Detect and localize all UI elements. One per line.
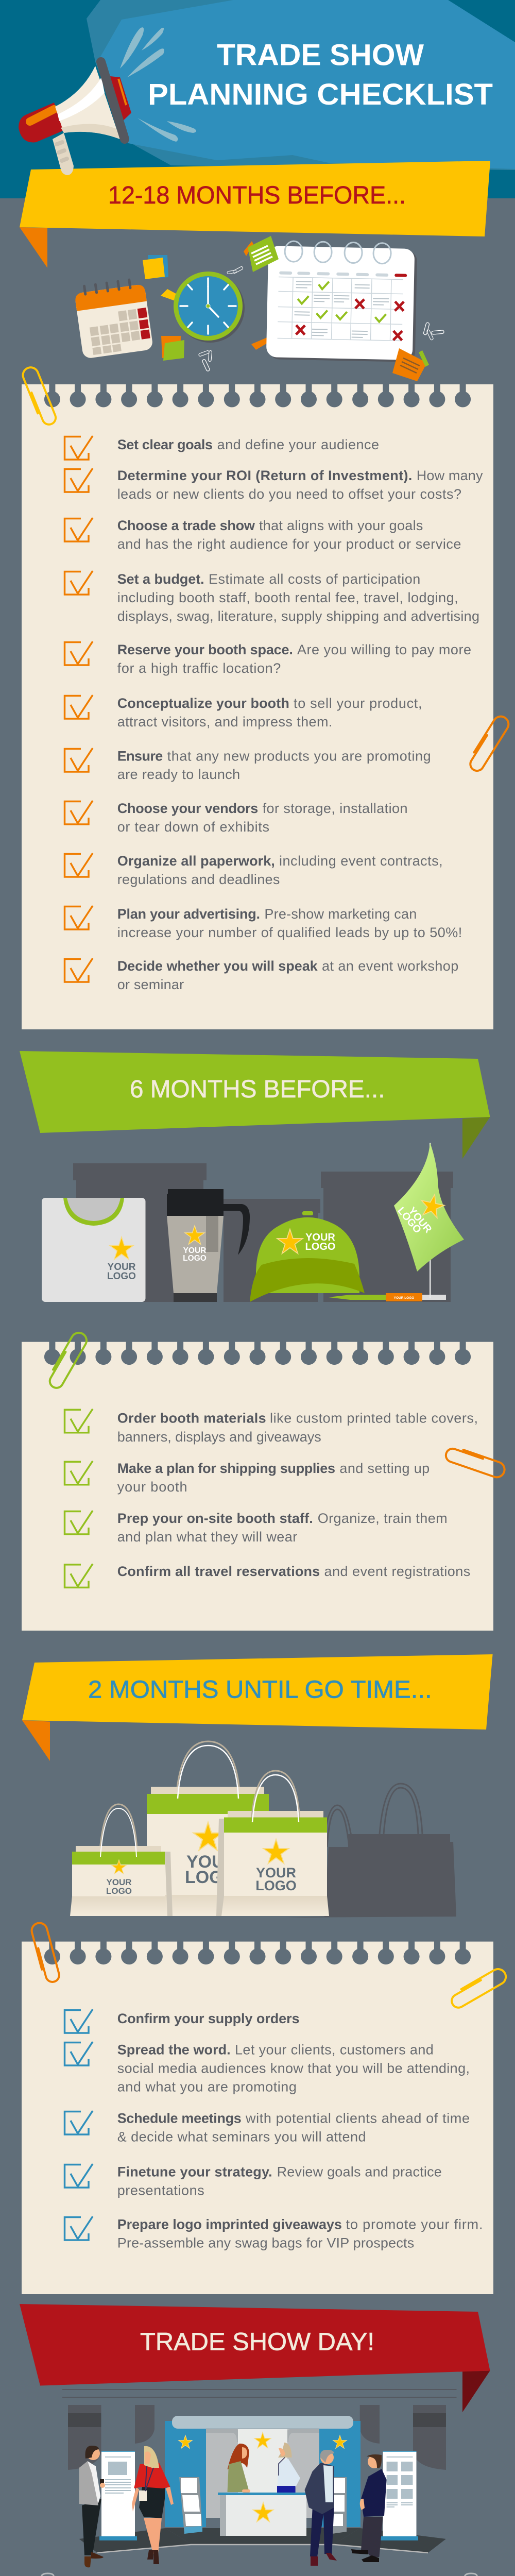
checklist item: prepare giveaways: Prepare logo imprinted giveaways: [117, 2216, 342, 2232]
icon: clock: [174, 272, 245, 343]
checklist item: order booth materials: [65, 1409, 478, 1445]
checklist item: organize paperwork: Organize all paperwork,: [117, 853, 275, 869]
paperclip orange: [30, 1921, 61, 1984]
person: man in dark jacket: [351, 2454, 387, 2562]
checklist item: reserve booth space: Are you willing to pay more: [297, 642, 471, 657]
paperclip green: [46, 1330, 89, 1391]
icon: wall calendar: [266, 241, 417, 362]
banner: 6 months before: [20, 1051, 490, 1159]
checklist item: finetune strategy: presentations: [117, 2183, 204, 2198]
checklist item: determine ROI: Determine your ROI (Return of Investment).: [117, 468, 412, 483]
checklist item: set a budget: Estimate all costs of participation: [209, 571, 420, 587]
checklist item: determine ROI: How many: [417, 468, 483, 483]
checklist item: set clear goals: [65, 436, 379, 460]
checklist item: finetune strategy: Finetune your strategy.: [117, 2164, 272, 2180]
checklist item: prepare giveaways: [65, 2216, 483, 2250]
title: [148, 38, 493, 111]
icon: megaphone: [19, 27, 196, 175]
checklist item: finetune strategy: Review goals and practice: [277, 2164, 442, 2180]
checklist item: ensure products: are ready to launch: [117, 767, 240, 782]
icon: small shopping bag: LOGO: [106, 1886, 132, 1896]
paper tear holes: [44, 1941, 471, 1964]
checklist item: organize paperwork: [65, 853, 443, 887]
banner: 2 months until go time: [22, 1654, 493, 1761]
checklist item: finetune strategy: [65, 2164, 442, 2198]
checklist item: set clear goals: Set clear goals: [117, 437, 213, 452]
icon: green cap: [250, 1211, 365, 1302]
checklist item: prep booth staff: Prep your on-site booth staff.: [117, 1511, 313, 1526]
brochure stands: [179, 2477, 347, 2534]
banner: trade show day: TRADE SHOW DAY!: [140, 2329, 374, 2356]
checklist item: schedule meetings: Schedule meetings: [117, 2111, 242, 2126]
checklist item: conceptualize booth: to sell your product,: [294, 696, 422, 711]
person: woman in light blue shirt: [277, 2443, 300, 2493]
checklist item: ensure products: Ensure: [117, 748, 163, 764]
banner: 12-18 months before: [20, 161, 490, 268]
floor: [79, 2528, 446, 2553]
icon: t-shirt with logo: [42, 1198, 145, 1302]
banner: 6 months before: 6 MONTHS BEFORE...: [130, 1076, 385, 1103]
checklist item: confirm supply orders: Confirm your supply orders: [117, 2011, 300, 2026]
panel: 6 months checklist paper: [22, 1342, 493, 1631]
checklist item: shipping plan: and setting up: [339, 1461, 430, 1476]
title: PLANNING CHECKLIST: [148, 78, 493, 111]
checklist item: ensure products: [65, 748, 431, 782]
icon: notes on calendar: [244, 236, 429, 381]
checklist item: reserve booth space: [65, 641, 471, 676]
checklist item: choose vendors: [65, 801, 408, 835]
checklist item: confirm supply orders: [65, 2009, 300, 2033]
paperclip yellow: [21, 365, 58, 427]
checklist item: choose a trade show: Choose a trade show: [117, 518, 255, 533]
checklist item: organize paperwork: regulations and deadlines: [117, 872, 280, 887]
icon: small shopping bag: [70, 1804, 173, 1916]
paper tear holes: [44, 1342, 471, 1365]
icon: large shopping bag: [147, 1741, 269, 1916]
panel: 12-18 months checklist paper: [22, 384, 493, 1029]
checklist item: shipping plan: Make a plan for shipping supplies: [117, 1461, 335, 1476]
display standee left: [99, 2451, 137, 2540]
icon: large shopping bag: LOGO: [185, 1868, 236, 1887]
checklist item: determine ROI: leads or new clients do you need to offset your costs?: [117, 486, 461, 502]
checklist item: ensure products: that any new products you are promoting: [167, 748, 431, 764]
icon: green cap: LOGO: [305, 1241, 335, 1252]
checklist item: shipping plan: your booth: [117, 1479, 187, 1495]
checklist item: confirm travel: Confirm all travel reservations: [117, 1564, 320, 1579]
checklist item: spread the word: Let your clients, customers and: [235, 2042, 434, 2058]
icon: small desk calendar: [74, 278, 153, 359]
checklist item: choose a trade show: [65, 518, 461, 552]
checklist item: prep booth staff: and plan what they will wear: [117, 1529, 297, 1545]
checklist item: set clear goals: and define your audience: [217, 437, 379, 452]
binder clip right: [451, 2573, 491, 2576]
icon: t-shirt with logo: YOUR: [108, 1262, 136, 1273]
checklist item: spread the word: social media audiences know that you will be attending,: [117, 2061, 470, 2076]
header background: [0, 0, 515, 198]
icon: dark bags silhouette: [286, 1784, 456, 1918]
checklist item: reserve booth space: Reserve your booth space.: [117, 642, 293, 657]
checklist item: set a budget: [65, 571, 479, 624]
checklist item: confirm travel: [65, 1564, 470, 1587]
paperclip yellow: [448, 1967, 509, 2010]
checklist item: schedule meetings: & decide what seminars you will attend: [117, 2129, 366, 2145]
icon: medium shopping bag: YOUR: [256, 1865, 296, 1880]
icon: large shopping bag: YOUR: [186, 1852, 237, 1872]
icon: sticky notes: [143, 255, 274, 361]
checklist item: prepare giveaways: to promote your firm.: [346, 2216, 483, 2232]
icon: pen: [329, 1293, 446, 1301]
banner: 12-18 months before: 12-18 MONTHS BEFORE...: [108, 182, 406, 209]
title: TRADE SHOW: [217, 38, 424, 72]
person: older man in navy jacket: [305, 2450, 337, 2566]
icon: pen: YOUR LOGO: [394, 1296, 414, 1300]
checklist item: organize paperwork: including event contracts,: [279, 853, 443, 869]
checklist item: prep booth staff: [65, 1511, 448, 1545]
banner: trade show day: [20, 2304, 490, 2412]
checklist item: choose vendors: Choose your vendors: [117, 801, 258, 816]
checklist item: prepare giveaways: Pre-assemble any swag bags for VIP prospects: [117, 2235, 414, 2250]
checklist item: conceptualize booth: attract visitors, and impress them.: [117, 714, 332, 730]
person: man with coffee: [79, 2446, 105, 2567]
checklist item: decide on speaking: or seminar: [117, 977, 184, 992]
checklist item: decide on speaking: [65, 958, 458, 992]
checklist item: spread the word: Spread the word.: [117, 2042, 231, 2058]
checklist item: decide on speaking: at an event workshop: [322, 958, 458, 974]
icon: t-shirt with logo: LOGO: [107, 1271, 136, 1282]
checklist item: order booth materials: Order booth materials: [117, 1411, 266, 1426]
icon: medium shopping bag: [216, 1771, 329, 1916]
background boxes: [73, 1163, 453, 1302]
checklist item: order booth materials: like custom printed table covers,: [270, 1411, 478, 1426]
checklist item: spread the word: and what you are promoting: [117, 2079, 297, 2094]
checklist item: decide on speaking: Decide whether you will speak: [117, 958, 318, 974]
icon: small paperclips: [198, 266, 444, 371]
checklist item: spread the word: [65, 2042, 470, 2094]
icon: flag: YOUR: [406, 1205, 434, 1235]
checklist item: order booth materials: banners, displays and giveaways: [117, 1429, 321, 1445]
banner: 2 months until go time: 2 MONTHS UNTIL GO TIME...: [88, 1676, 432, 1704]
checklist item: conceptualize booth: [65, 695, 422, 730]
checklist item: plan advertising: Plan your advertising.: [117, 906, 260, 922]
checklist item: set a budget: displays, swag, literature, supply shipping and advertising: [117, 608, 479, 624]
checklist item: plan advertising: increase your number of qualified leads by up to 50%!: [117, 925, 462, 940]
icon: medium shopping bag: LOGO: [255, 1878, 297, 1893]
icon: flag: [394, 1143, 464, 1298]
icon: travel mug: [167, 1189, 250, 1302]
icon: flag: LOGO: [395, 1205, 423, 1235]
icon: small shopping bag: YOUR: [106, 1877, 132, 1887]
checklist item: set a budget: Set a budget.: [117, 571, 204, 587]
checklist item: plan advertising: [65, 906, 462, 940]
checklist item: confirm travel: and event registrations: [324, 1564, 470, 1579]
checklist item: set a budget: including booth staff, booth rental fee, travel, lodging,: [117, 590, 458, 605]
paperclip orange: [466, 714, 511, 773]
checklist item: shipping plan: [65, 1461, 430, 1495]
checklist item: choose a trade show: that aligns with your goals: [259, 518, 423, 533]
desk: [218, 2493, 307, 2536]
checklist item: conceptualize booth: Conceptualize your booth: [117, 696, 289, 711]
exhibition hall background: [62, 2389, 456, 2470]
binder clip left: [28, 2573, 67, 2576]
person: woman in red blouse: [132, 2446, 174, 2564]
icon: travel mug: YOUR: [183, 1246, 206, 1255]
checklist item: schedule meetings: with potential clients ahead of time: [245, 2111, 470, 2126]
panel: 2 months checklist paper: [22, 1942, 493, 2294]
icon: green cap: YOUR: [305, 1232, 335, 1243]
booth structure: [165, 2416, 360, 2527]
checklist item: choose a trade show: and has the right audience for your product or service: [117, 536, 461, 552]
person: woman in olive jacket: [228, 2444, 250, 2493]
paper tear holes: [44, 384, 471, 407]
checklist item: schedule meetings: [65, 2111, 470, 2145]
checklist item: determine ROI: [65, 468, 483, 502]
display standee right: [381, 2451, 418, 2540]
checklist item: prep booth staff: Organize, train them: [318, 1511, 448, 1526]
paperclip orange: [444, 1445, 507, 1479]
checklist item: reserve booth space: for a high traffic location?: [117, 660, 281, 676]
checklist item: choose vendors: for storage, installation: [263, 801, 408, 816]
checklist item: choose vendors: or tear down of exhibits: [117, 819, 269, 835]
icon: travel mug: LOGO: [183, 1254, 207, 1263]
checklist item: plan advertising: Pre-show marketing can: [264, 906, 417, 922]
